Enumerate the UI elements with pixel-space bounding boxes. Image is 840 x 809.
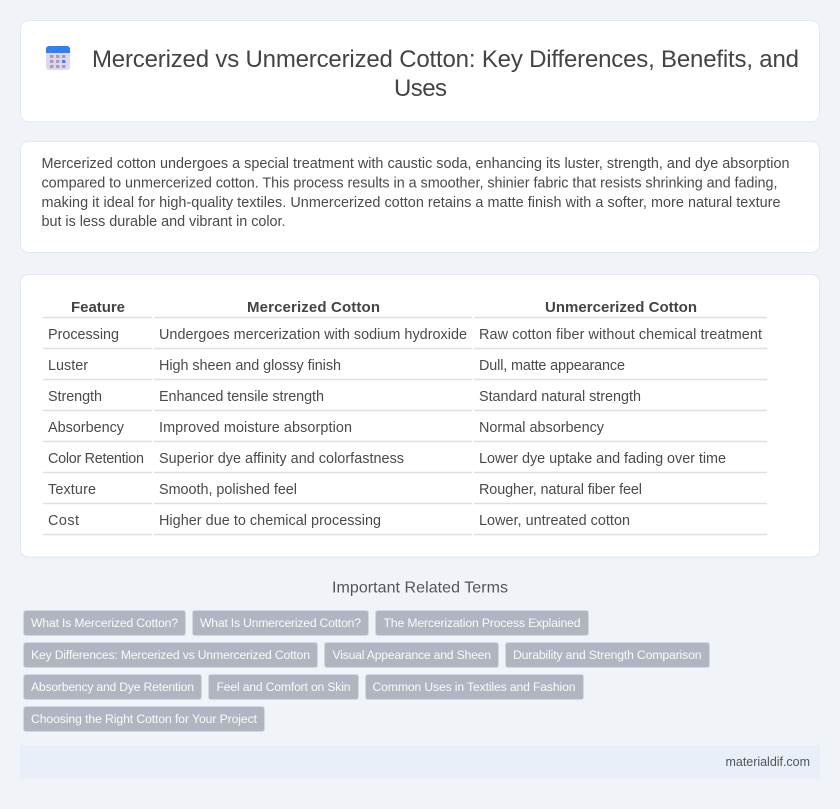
row: color retention: Lower dye uptake and fading over time	[479, 451, 726, 467]
chip: Absorbency and Dye Retention	[31, 680, 194, 694]
chip	[324, 642, 498, 668]
chip: Feel and Comfort on Skin	[216, 680, 350, 694]
footer	[20, 745, 820, 779]
text block: introduction: Mercerized cotton undergoes a special treatment with caustic soda, enhancing its luster, strength, and dye absorption	[42, 156, 790, 172]
row: color retention: Color Retention	[48, 451, 144, 467]
text block: introduction	[42, 156, 790, 230]
chip: Key Differences: Mercerized vs Unmercerized Cotton	[31, 648, 310, 662]
text block: introduction: compared to unmercerized cotton. This process results in a smoother, shinier fabric that resists shrinking and fading,	[42, 176, 778, 192]
panel: comparison table	[20, 274, 820, 557]
row: strength	[48, 389, 641, 405]
row: strength: Strength	[48, 389, 102, 405]
row: processing: Raw cotton fiber without chemical treatment	[479, 327, 762, 343]
related term chips	[24, 610, 710, 732]
row: absorbency: Absorbency	[48, 420, 125, 436]
row: luster: High sheen and glossy finish	[159, 358, 341, 374]
row: strength: Standard natural strength	[479, 389, 641, 405]
footer: materialdif.com	[726, 755, 810, 769]
row: luster	[48, 358, 625, 374]
heading: related terms: Important Related Terms	[332, 580, 508, 596]
row: cost: Cost	[48, 513, 79, 529]
row: texture: Texture	[48, 482, 96, 498]
row: processing: Processing	[48, 327, 119, 343]
row: color retention: Superior dye affinity and colorfastness	[159, 451, 404, 467]
panel: introduction	[20, 142, 820, 252]
panel: header	[20, 20, 820, 122]
row: processing: Undergoes mercerization with sodium hydroxide	[159, 327, 467, 343]
row: luster: Dull, matte appearance	[479, 358, 625, 374]
row: processing	[48, 327, 762, 343]
table header: Feature	[71, 299, 125, 316]
icon: calendar	[46, 46, 70, 70]
row: texture: Rougher, natural fiber feel	[479, 482, 642, 498]
title	[92, 46, 799, 102]
table header: Unmercerized Cotton	[545, 299, 697, 316]
text block: introduction: but is less durable and vibrant in color.	[42, 214, 286, 230]
chip	[24, 674, 202, 700]
chip: Durability and Strength Comparison	[513, 648, 702, 662]
table header: Mercerized Cotton	[247, 299, 380, 316]
row: absorbency: Normal absorbency	[479, 420, 605, 436]
chip: Visual Appearance and Sheen	[332, 648, 491, 662]
row: cost	[48, 513, 630, 529]
chip	[208, 674, 358, 700]
chip: Common Uses in Textiles and Fashion	[372, 680, 576, 694]
table header	[71, 299, 697, 316]
title: Uses	[394, 75, 447, 102]
chip	[24, 706, 264, 732]
chip	[24, 610, 186, 636]
row: texture: Smooth, polished feel	[159, 482, 297, 498]
row: absorbency: Improved moisture absorption	[159, 420, 352, 436]
chip	[366, 674, 584, 700]
row: cost: Higher due to chemical processing	[159, 513, 381, 529]
text block: introduction: making it ideal for high-quality textiles. Unmercerized cotton retains a matte finish with a softer, more natural texture	[42, 195, 780, 211]
chip: What Is Unmercerized Cotton?	[200, 616, 361, 630]
row: absorbency	[48, 420, 605, 436]
row: luster: Luster	[48, 358, 88, 374]
chip	[376, 610, 588, 636]
chip	[24, 642, 318, 668]
row: strength: Enhanced tensile strength	[159, 389, 324, 405]
row: texture	[48, 482, 642, 498]
chip: The Mercerization Process Explained	[384, 616, 580, 630]
chip: Choosing the Right Cotton for Your Project	[31, 712, 258, 726]
chip: What Is Mercerized Cotton?	[31, 616, 178, 630]
row: color retention	[48, 451, 726, 467]
chip	[192, 610, 368, 636]
row: cost: Lower, untreated cotton	[479, 513, 630, 529]
chip	[506, 642, 710, 668]
title: Mercerized vs Unmercerized Cotton: Key Differences, Benefits, and	[92, 46, 799, 73]
